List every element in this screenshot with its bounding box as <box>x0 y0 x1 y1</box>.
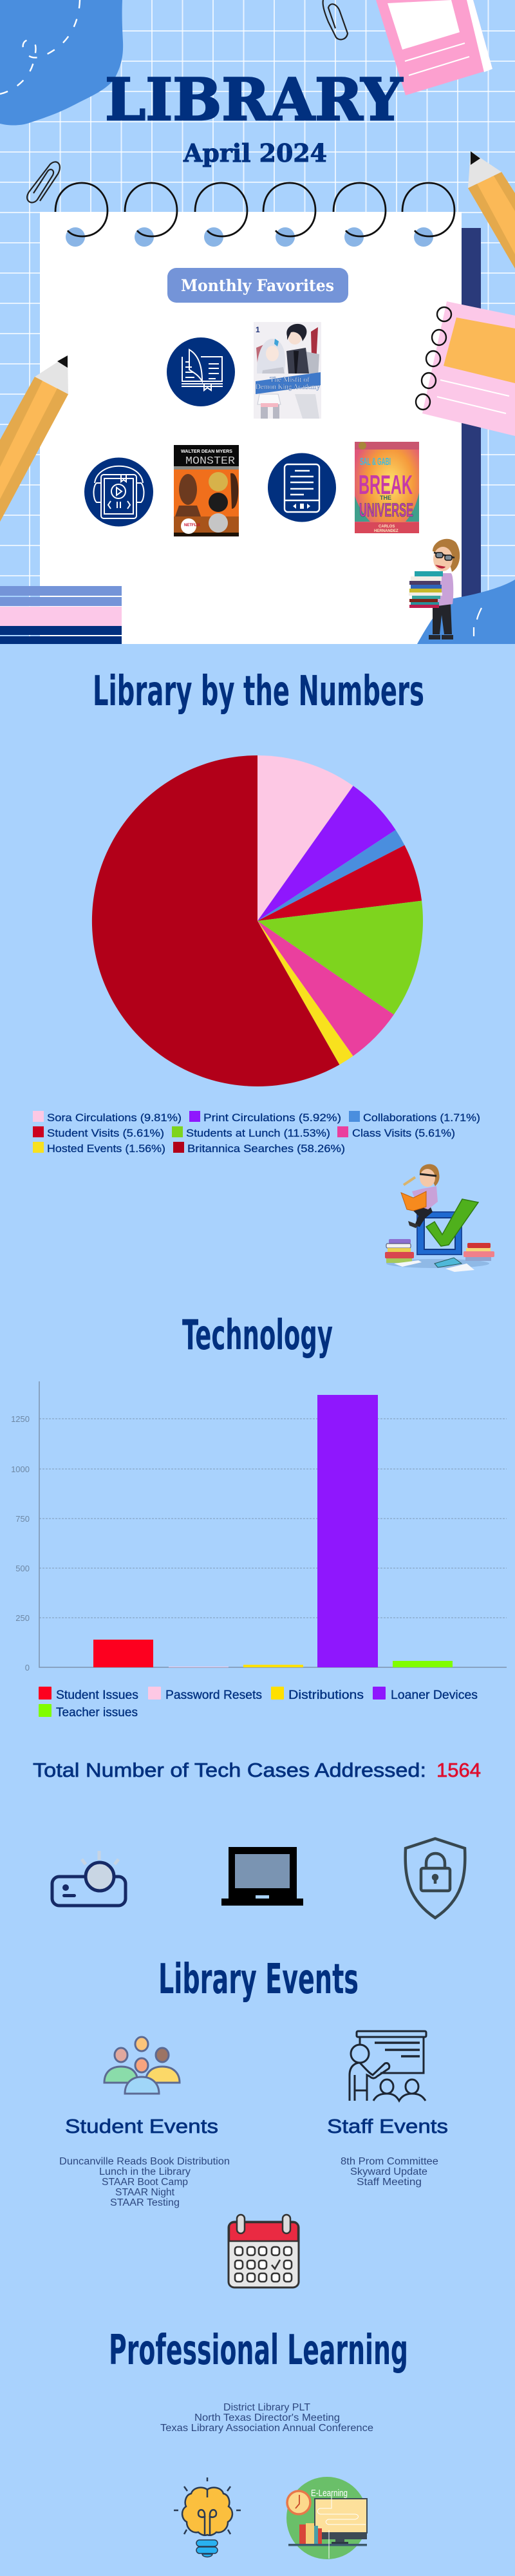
spiral binding holes <box>66 227 433 247</box>
pie legend: Britannica Searches (58.26%) <box>187 1142 345 1155</box>
blob: top left <box>0 0 123 125</box>
list: student events: STAAR Testing <box>110 2197 180 2208</box>
icon: right pencil <box>468 151 515 269</box>
icon: students <box>104 2037 180 2094</box>
bar chart: technology: 1000 <box>11 1464 30 1474</box>
bar chart legend: Teacher issues <box>56 1706 138 1719</box>
list: student events <box>59 2156 230 2208</box>
list: professional learning: North Texas Director's Meeting <box>194 2412 340 2423</box>
list: staff events: 8th Prom Committee <box>341 2156 438 2167</box>
icon: e-reader circle <box>268 453 336 522</box>
stripes: bottom left <box>0 586 122 644</box>
book cover: Break the Universe: CARLOS <box>379 525 395 529</box>
spiral binding rings <box>55 183 454 236</box>
title: LIBRARY <box>105 66 404 134</box>
book cover: The Misfit of Demon King Academy: 1 <box>256 325 260 334</box>
bar chart legend: Student Issues <box>56 1689 138 1702</box>
icon: audiobook circle <box>84 457 153 527</box>
book cover: The Misfit of Demon King Academy <box>254 322 321 419</box>
pie legend: Hosted Events (1.56%) <box>47 1142 165 1155</box>
book cover: Monster: MONSTER <box>185 455 235 468</box>
pie legend: Collaborations (1.71%) <box>363 1112 480 1124</box>
bar chart: technology: 750 <box>15 1514 30 1524</box>
list: student events: Lunch in the Library <box>99 2166 191 2177</box>
heading: technology: Technology <box>182 1312 333 1359</box>
list: staff events: Staff Meeting <box>357 2177 422 2188</box>
list: professional learning: District Library PLT <box>223 2402 311 2413</box>
book cover: Monster: WALTER DEAN MYERS <box>181 450 232 454</box>
book cover: Monster <box>174 445 239 536</box>
total tech cases: Total Number of Tech Cases Addressed: <box>33 1759 426 1781</box>
bar chart: technology: 0 <box>25 1663 30 1672</box>
button: monthly favorites <box>167 268 348 303</box>
pie legend: Students at Lunch (11.53%) <box>186 1127 330 1139</box>
icon: sticky notebook <box>416 301 515 436</box>
list: professional learning: Texas Library Association Annual Conference <box>160 2423 373 2434</box>
list: student events: Duncanville Reads Book Distribution <box>59 2156 230 2167</box>
button: monthly favorites: Monthly Favorites <box>181 276 334 295</box>
book cover: Monster: NETFLIX <box>184 524 200 527</box>
bar chart: technology: 1250 <box>11 1414 30 1424</box>
book cover: Break the Universe: UNIVERSE <box>359 500 413 521</box>
list: staff events <box>341 2156 438 2188</box>
icon: projector <box>52 1851 126 1906</box>
icon: pink book <box>376 0 492 95</box>
icon: left pencil <box>0 355 68 522</box>
icon: shield with lock <box>406 1839 465 1918</box>
character: reader on checkbox <box>385 1164 494 1272</box>
icon: laptop <box>221 1847 303 1906</box>
icon: staff presentation <box>350 2031 426 2101</box>
pie legend <box>33 1111 480 1155</box>
book cover: Break the Universe: HERNANDEZ <box>374 529 398 533</box>
icon: calendar <box>229 2215 299 2287</box>
icon: e-learning: E-Learning <box>311 2488 348 2499</box>
subtitle: April 2024 <box>183 138 327 167</box>
icon: paperclip left <box>27 162 60 202</box>
icon: brain light bulb <box>174 2477 241 2557</box>
book cover: Break the Universe <box>355 442 419 533</box>
heading: library events: Library Events <box>158 1956 359 2003</box>
book cover: Break the Universe: BREAK <box>359 469 413 500</box>
bar chart: technology: 250 <box>15 1613 30 1623</box>
pie chart <box>92 755 423 1086</box>
icon: book circle <box>167 337 235 406</box>
subheading: student events: Student Events <box>65 2115 218 2137</box>
bar chart legend <box>39 1687 478 1719</box>
blob: bottom right <box>417 580 515 644</box>
pie legend: Sora Circulations (9.81%) <box>47 1112 182 1124</box>
pie legend: Student Visits (5.61%) <box>47 1127 164 1139</box>
notebook page <box>40 212 481 644</box>
pie legend: Print Circulations (5.92%) <box>203 1112 341 1124</box>
total tech cases: 1564 <box>436 1759 481 1781</box>
bar chart: technology <box>11 1381 507 1672</box>
bar chart: technology: 500 <box>15 1564 30 1573</box>
list: student events: STAAR Night <box>115 2187 175 2198</box>
icon: e-learning <box>286 2477 368 2559</box>
book cover: Break the Universe: THE <box>380 495 391 501</box>
book cover: The Misfit of Demon King Academy: Demon King Academy <box>256 382 320 391</box>
book cover: Break the Universe: SAL & GABI <box>360 457 391 468</box>
bar chart legend: Distributions <box>288 1689 364 1702</box>
subheading: staff events: Staff Events <box>327 2115 448 2137</box>
bar chart legend: Password Resets <box>165 1689 262 1702</box>
list: student events: STAAR Boot Camp <box>102 2177 188 2188</box>
bar chart legend: Loaner Devices <box>391 1689 478 1702</box>
list: staff events: Skyward Update <box>350 2166 427 2177</box>
book cover: The Misfit of Demon King Academy: The Misfit of <box>270 375 310 384</box>
pie legend: Class Visits (5.61%) <box>352 1127 455 1139</box>
list: professional learning <box>160 2402 373 2434</box>
character: librarian holding books <box>409 539 460 639</box>
icon: paperclip top <box>323 0 348 39</box>
